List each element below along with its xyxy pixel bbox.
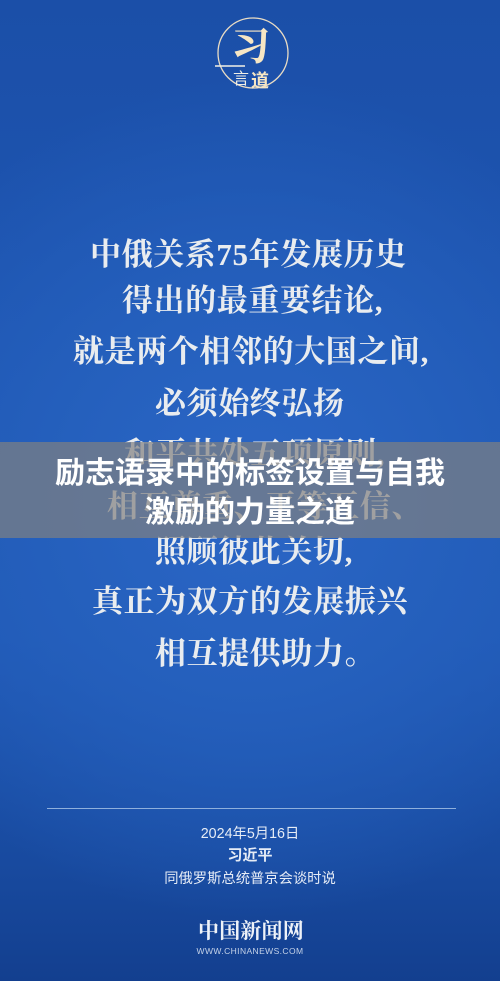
- main quotation text: 中俄关系75年发展历史: [90, 237, 407, 272]
- main quotation text: 和平共处五项原则,: [124, 436, 385, 471]
- main quotation text: [73, 237, 429, 671]
- source divider line: [47, 808, 456, 809]
- icon: 习言道 circular logo: 习: [231, 16, 270, 72]
- main quotation text: 相互尊重、平等互信、: [107, 489, 423, 524]
- main quotation text: 真正为双方的发展振兴: [92, 584, 408, 619]
- icon: 习言道 circular logo: 道: [251, 67, 269, 93]
- title: 励志语录中的标签设置与自我: [55, 457, 445, 490]
- speaker name: 习近平: [227, 847, 272, 864]
- date: 2024年5月16日: [201, 826, 299, 842]
- China News logo: WWW.CHINANEWS.COM: [197, 946, 303, 956]
- grey title band: [0, 442, 500, 538]
- icon: 习言道 circular logo: [215, 16, 289, 93]
- title: [55, 457, 445, 529]
- main quotation text: 相互提供助力。: [155, 636, 376, 671]
- China News logo: 中国新闻网: [198, 919, 304, 943]
- China News logo: [196, 919, 304, 956]
- main quotation text: 就是两个相邻的大国之间,: [73, 334, 429, 369]
- title: 激励的力量之道: [145, 496, 355, 529]
- icon: 习言道 circular logo: 言: [233, 65, 249, 89]
- main quotation text: 得出的最重要结论,: [122, 283, 383, 318]
- main quotation text: 照顾彼此关切,: [155, 534, 353, 569]
- occasion: 同俄罗斯总统普京会谈时说: [164, 871, 336, 887]
- main quotation text: 必须始终弘扬: [155, 386, 345, 421]
